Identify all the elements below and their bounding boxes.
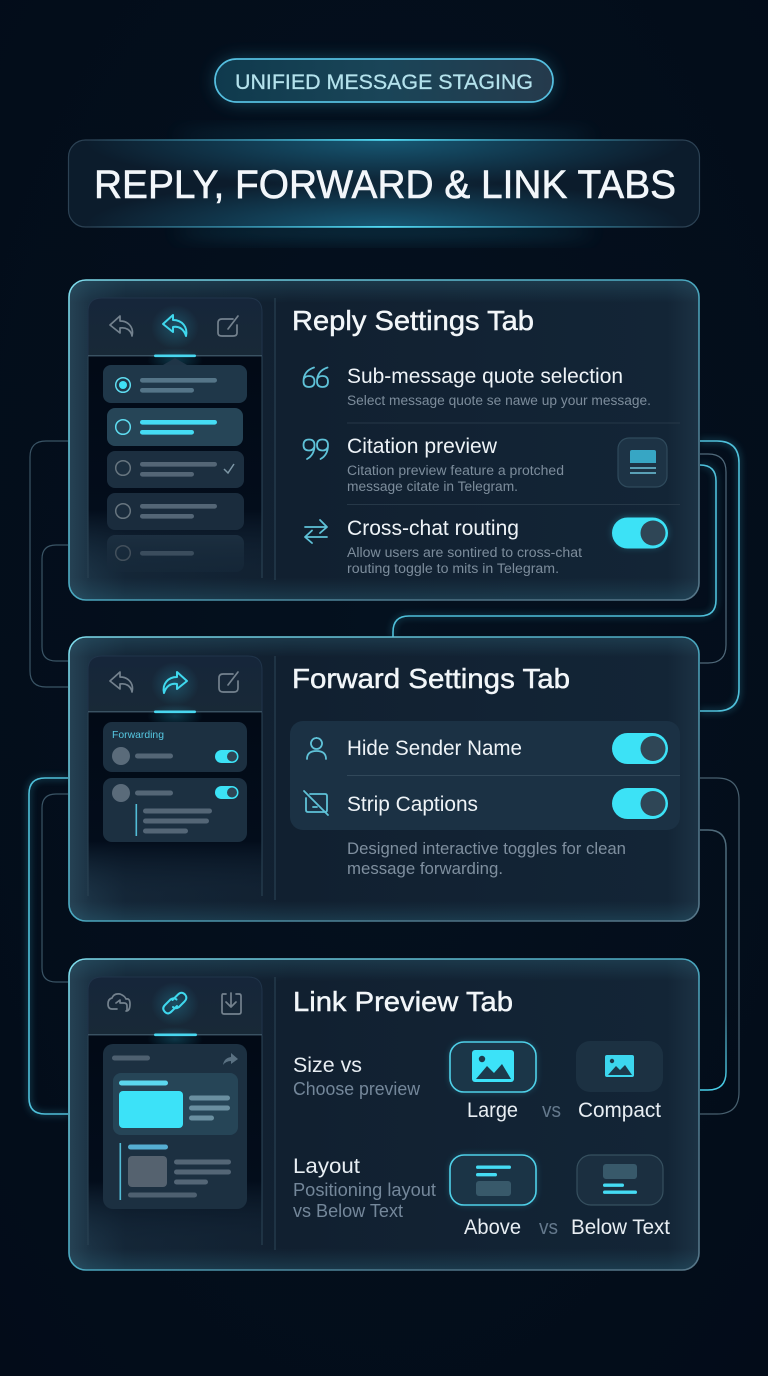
- item: citation preview: [304, 435, 667, 494]
- forward heading: Forward Settings Tab: [292, 663, 570, 694]
- layout option: vs: [539, 1217, 558, 1239]
- option: below text: Below Text: [571, 1216, 670, 1239]
- toggles card: Strip Captions: [347, 793, 478, 816]
- header pill: UNIFIED MESSAGE STAGING: [235, 71, 533, 94]
- size option: vs: [542, 1100, 561, 1122]
- layout option: Positioning layout: [293, 1180, 436, 1200]
- option: below text: [571, 1155, 670, 1239]
- option: above: Above: [464, 1216, 521, 1239]
- size option: Choose preview: [293, 1079, 421, 1099]
- toggles card: [290, 721, 680, 830]
- item: cross-chat routing: Allow users are sontired to cross-chat: [347, 545, 582, 560]
- icon: strip captions: [304, 791, 328, 815]
- forward description: [347, 840, 626, 878]
- item: citation preview: message citate in Telegram.: [347, 479, 518, 494]
- item: cross-chat routing: Cross-chat routing: [347, 517, 519, 540]
- forward sidebar mock: Forwarding: [112, 729, 164, 741]
- layout option: Layout: [293, 1155, 360, 1178]
- item: sub-message quote selection: Select message quote se nawe up your message.: [347, 393, 651, 408]
- forward description: message forwarding.: [347, 860, 503, 878]
- link sidebar mock: [88, 977, 275, 1250]
- option: compact: Compact: [578, 1099, 661, 1122]
- title box: [68, 128, 700, 240]
- item: sub-message quote selection: [304, 365, 651, 408]
- item: citation preview: Citation preview feature a protched: [347, 463, 564, 478]
- toggle: hide sender: [612, 733, 668, 764]
- size option: [293, 1041, 663, 1122]
- toggles card: Hide Sender Name: [347, 737, 522, 760]
- toggle: routing: [612, 517, 668, 548]
- option: above: [450, 1155, 536, 1239]
- forward sidebar mock: [88, 656, 275, 902]
- item: cross-chat routing: [305, 517, 668, 576]
- reply sidebar mock: [88, 298, 275, 582]
- item: cross-chat routing: routing toggle to mits in Telegram.: [347, 561, 559, 576]
- icon: link: [163, 993, 186, 1013]
- panel: forward settings: [69, 637, 699, 921]
- link heading: Link Preview Tab: [293, 986, 513, 1017]
- forward description: Designed interactive toggles for clean: [347, 840, 626, 858]
- title box: REPLY, FORWARD & LINK TABS: [94, 163, 676, 207]
- panel: reply settings: [69, 280, 699, 600]
- connector lines: [29, 441, 739, 1114]
- option: large: Large: [467, 1099, 518, 1122]
- item: sub-message quote selection: Sub-message quote selection: [347, 365, 623, 388]
- option: large: [450, 1042, 536, 1122]
- icon: citation card: [618, 438, 667, 487]
- option: compact: [576, 1041, 663, 1122]
- reply heading: Reply Settings Tab: [292, 305, 534, 336]
- toggle: strip captions: [612, 788, 668, 819]
- panel: link preview: [69, 959, 699, 1270]
- icon: person: [307, 738, 326, 759]
- header pill: [215, 59, 553, 102]
- item: citation preview: Citation preview: [347, 435, 498, 458]
- layout option: [293, 1155, 670, 1239]
- size option: Size vs: [293, 1054, 362, 1077]
- layout option: vs Below Text: [293, 1201, 403, 1221]
